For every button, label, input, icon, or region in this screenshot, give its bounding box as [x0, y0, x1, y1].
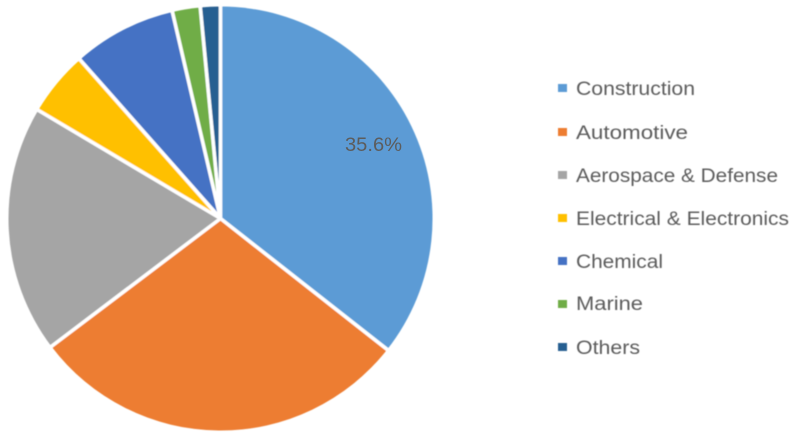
- legend item: Chemical: Chemical: [576, 252, 663, 273]
- slice: Automotive: [51, 218, 387, 431]
- legend item: Construction: Construction: [576, 79, 695, 100]
- slice: Others: [200, 6, 220, 218]
- legend item: Marine: Marine: [576, 294, 643, 315]
- legend: [558, 79, 789, 359]
- slice: Construction: [220, 6, 433, 349]
- legend item: Automotive: Automotive: [576, 123, 688, 144]
- legend item: Electrical & Electronics: Electrical & Electronics: [576, 209, 789, 230]
- slice: Aerospace & Defense: [8, 110, 220, 346]
- legend item: Others: Others: [576, 338, 640, 359]
- legend item: Others: [558, 338, 640, 359]
- legend item: Aerospace & Defense: Aerospace & Defense: [576, 166, 778, 187]
- pie chart: [8, 3, 433, 431]
- slice: Electrical & Electronics: [38, 60, 221, 219]
- slice: Chemical: [80, 12, 220, 218]
- data label: 35.6%: 35.6%: [345, 135, 402, 156]
- legend item: Marine: [558, 294, 643, 315]
- slice: Marine: [172, 8, 220, 218]
